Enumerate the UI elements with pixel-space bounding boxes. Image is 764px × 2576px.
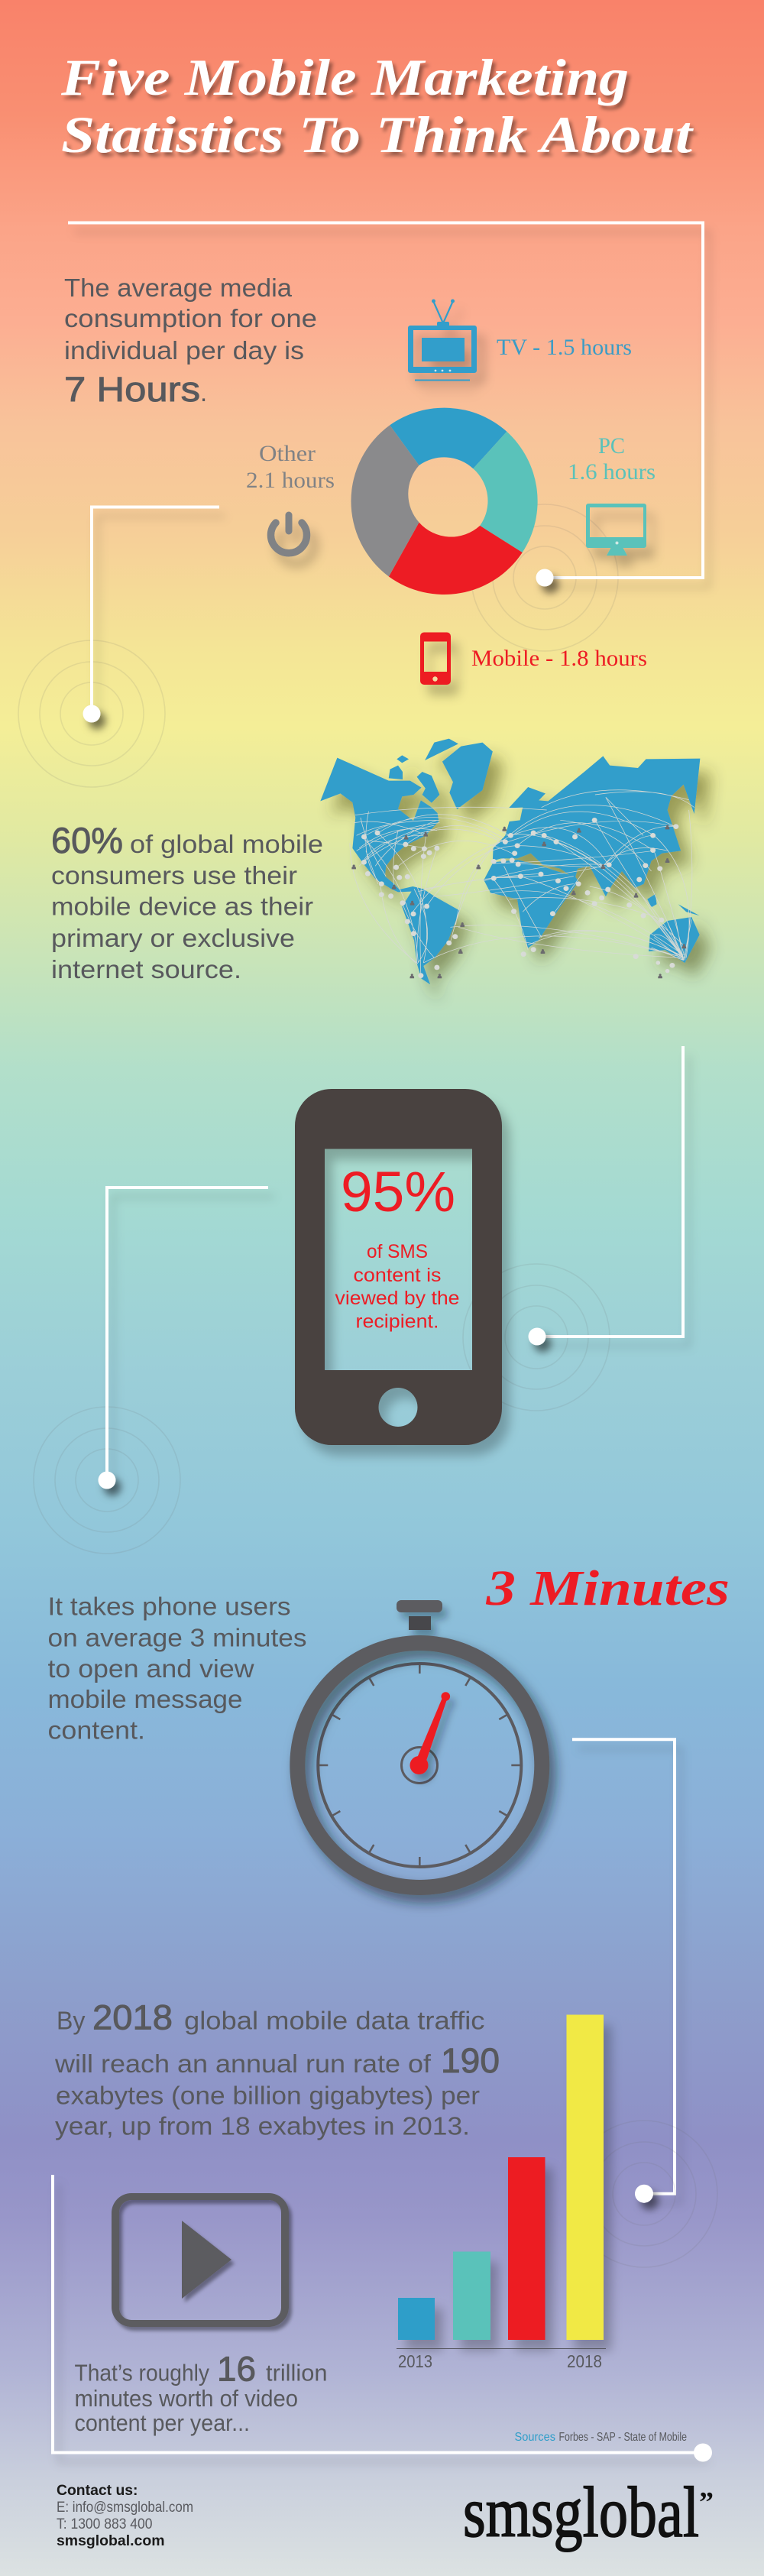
stat: 95 percent: 95% [341, 1160, 455, 1223]
stat: 95 percent: viewed by the [335, 1288, 460, 1309]
icon: power [270, 515, 307, 553]
stat: 95 percent: of SMS [367, 1241, 428, 1262]
text: video minutes: content per year... [75, 2409, 250, 2436]
centre ring [402, 1747, 437, 1784]
connector left [83, 507, 219, 723]
sources [515, 2431, 687, 2444]
text: 60 percent: mobile device as their [51, 893, 313, 920]
text: three minutes: on average 3 minutes [47, 1623, 307, 1651]
signal rings right [471, 504, 618, 651]
text: video minutes [75, 2349, 327, 2436]
text: three minutes: content. [47, 1716, 145, 1744]
signal rings [571, 2121, 717, 2267]
donut chart [351, 408, 538, 595]
axis label: 2018: 2018 [567, 2351, 602, 2371]
text: 60 percent: primary or exclusive [51, 924, 295, 952]
icon: stopwatch [290, 1600, 549, 1895]
label: other [246, 441, 335, 493]
title [60, 48, 694, 164]
icon: play button [112, 2193, 289, 2327]
text: video minutes: trillion [266, 2359, 327, 2386]
signal rings left [18, 640, 165, 787]
icon: tv [408, 300, 477, 381]
signal rings right [463, 1264, 610, 1411]
text: 60 percent [51, 820, 323, 983]
hand [410, 1692, 450, 1774]
text: traffic forecast: global mobile data traffic [184, 2007, 484, 2035]
footer: contact details: E: info@smsglobal.com [57, 2500, 193, 2516]
dial [318, 1664, 521, 1867]
text: traffic forecast: 190 [441, 2041, 500, 2080]
text: traffic forecast: exabytes (one billion gigabytes) per [56, 2081, 480, 2109]
tick marks [318, 1664, 521, 1867]
text: video minutes: 16 [217, 2349, 256, 2388]
axis [397, 2348, 606, 2349]
end dot [694, 2444, 712, 2462]
text: 60 percent: consumers use their [51, 861, 297, 889]
icon: mobile [420, 633, 451, 685]
label: tv: TV - 1.5 hours [497, 335, 632, 360]
label: pc: PC [598, 433, 625, 458]
text: traffic forecast: By [57, 2007, 86, 2035]
intro text: consumption for one [64, 304, 317, 332]
text: 60 percent: 60% [51, 820, 123, 860]
label: pc [568, 433, 656, 484]
heading: 3 minutes: 3 Minutes [485, 1560, 730, 1616]
stat: 95 percent: recipient. [356, 1311, 439, 1333]
label: mobile: Mobile - 1.8 hours [471, 646, 647, 671]
text: traffic forecast: 2018 [92, 1998, 173, 2037]
footer: contact details: T: 1300 883 400 [57, 2516, 153, 2532]
footer: contact details: Contact us: [57, 2483, 138, 2499]
land masses [320, 739, 700, 984]
connector [572, 1739, 675, 2203]
connector frame [53, 2175, 703, 2453]
text: three minutes: mobile message [47, 1685, 243, 1713]
panel: sms open rate [34, 1046, 683, 1554]
text: traffic forecast [54, 1998, 500, 2140]
icon: monitor [586, 504, 646, 556]
text: three minutes: It takes phone users [47, 1593, 290, 1620]
connector right [529, 1046, 683, 1345]
footer: logo: ” [699, 2487, 714, 2519]
text: three minutes: to open and view [47, 1654, 254, 1683]
title: Statistics To Think About [61, 105, 694, 164]
segment: pc [473, 432, 538, 552]
stat: 95 percent [335, 1160, 460, 1333]
crown [397, 1600, 442, 1630]
sources: Sources [515, 2431, 555, 2444]
text: 60 percent: of global mobile [130, 830, 323, 858]
label: other: Other [259, 441, 316, 466]
panel: media consumption [18, 223, 703, 787]
text: traffic forecast: year, up from 18 exabytes in 2013. [55, 2111, 470, 2140]
person markers [351, 825, 686, 978]
world map [320, 739, 700, 984]
case ring [290, 1635, 549, 1895]
footer: contact details: smsglobal.com [57, 2533, 165, 2549]
connector left [98, 1188, 268, 1489]
text: three minutes [47, 1593, 307, 1744]
panel: time to open [47, 1560, 730, 2203]
panel: data traffic [53, 1998, 717, 2462]
segment: other [351, 425, 419, 576]
location dots [361, 818, 678, 978]
label: other: 2.1 hours [246, 468, 335, 493]
segment: tv [390, 408, 507, 468]
sources: Forbes - SAP - State of Mobile [559, 2431, 687, 2444]
connector frame [68, 223, 703, 587]
text: traffic forecast: will reach an annual run rate of [54, 2049, 432, 2078]
text: video minutes: minutes worth of video [75, 2385, 298, 2412]
axis label: 2013: 2013 [398, 2351, 432, 2371]
text: 60 percent: internet source. [51, 955, 241, 983]
connection arcs [350, 790, 694, 976]
title: Five Mobile Marketing [60, 48, 629, 106]
footer: logo: smsglobal [463, 2473, 699, 2552]
intro text: individual per day is [64, 336, 304, 365]
text: video minutes: That’s roughly [75, 2359, 209, 2386]
intro text: 7 Hours [64, 370, 200, 409]
panel: global mobile consumers [51, 739, 700, 984]
intro text [64, 274, 317, 409]
intro text: . [200, 378, 207, 407]
bar chart [397, 2014, 606, 2371]
footer: contact details [57, 2483, 193, 2549]
segment: mobile [389, 523, 523, 595]
stat: 95 percent: content is [353, 1265, 442, 1286]
label: pc: 1.6 hours [568, 459, 656, 484]
icon: phone [295, 1089, 502, 1445]
intro text: The average media [64, 274, 293, 302]
signal rings left [34, 1407, 180, 1554]
bars [398, 2014, 604, 2340]
